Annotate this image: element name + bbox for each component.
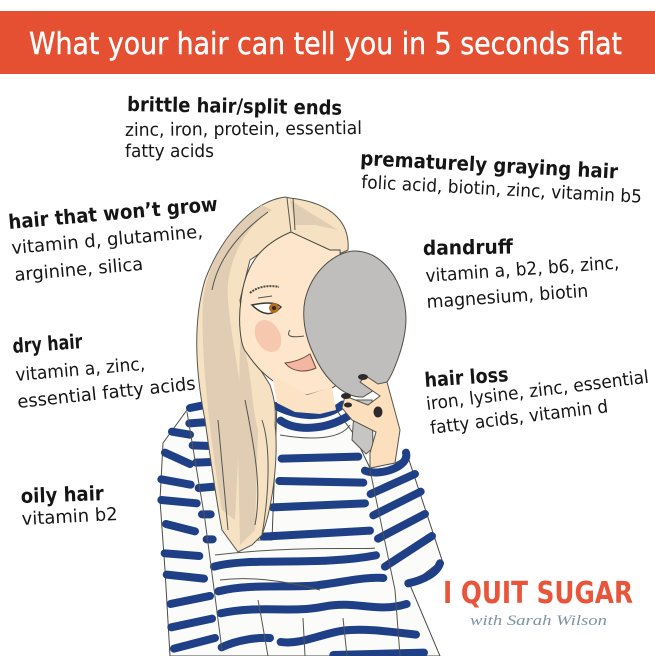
text: dandruff: magnesium, biotin [426, 281, 589, 313]
face [240, 232, 345, 395]
text: dandruff [423, 234, 620, 313]
mirror handle [352, 400, 373, 454]
illustration: woman with mirror [160, 197, 442, 656]
hair part lines [212, 198, 295, 535]
text: brittle hair [125, 92, 362, 162]
logo: I Quit Sugar [443, 576, 633, 629]
shirt seams [187, 412, 400, 656]
neck [272, 375, 336, 414]
text: dandruff: dandruff [423, 234, 514, 260]
text: hair that won't grow: arginine, silica [14, 254, 144, 286]
text: oily hair [20, 481, 118, 530]
nose [289, 330, 304, 337]
text: dry hair: essential fatty acids [16, 373, 197, 413]
text: hair that won't grow [7, 192, 219, 286]
eye and eyebrow [250, 286, 281, 314]
text: brittle hair: fatty acids [125, 141, 214, 162]
title banner [0, 11, 655, 74]
text: prematurely graying hair [360, 146, 642, 208]
text: prematurely graying hair: folic acid, biotin, zinc, vitamin b5 [361, 172, 642, 208]
lips [285, 354, 316, 371]
text: oily hair: oily hair [20, 481, 104, 508]
text: hair that won't grow: vitamin d, glutamine, [11, 221, 204, 259]
hair [197, 197, 348, 552]
shirt stripes [161, 405, 440, 655]
text: hair loss: hair loss [424, 362, 509, 392]
text: dandruff: vitamin a, b2, b6, zinc, [425, 253, 620, 287]
hand [342, 376, 400, 468]
text: dry hair [12, 329, 197, 413]
text: hair that won't grow: hair that won’t grow [7, 192, 219, 234]
shirt [160, 400, 442, 656]
blush [249, 315, 287, 357]
mirror [304, 251, 406, 397]
text: brittle hair: brittle hair/split ends [127, 92, 342, 120]
text: prematurely graying hair: prematurely graying hair [360, 146, 619, 184]
text: dry hair: dry hair [12, 329, 83, 358]
text: oily hair: vitamin b2 [21, 504, 118, 530]
text: brittle hair: zinc, iron, protein, essential [125, 118, 362, 141]
text: dry hair: vitamin a, zinc, [15, 354, 146, 386]
text: hair loss [424, 362, 650, 439]
logo: I Quit Sugar: with Sarah Wilson [470, 613, 607, 629]
hair shading [203, 200, 338, 545]
text: hair loss: fatty acids, vitamin d [429, 396, 609, 439]
nails and ring [341, 374, 382, 418]
